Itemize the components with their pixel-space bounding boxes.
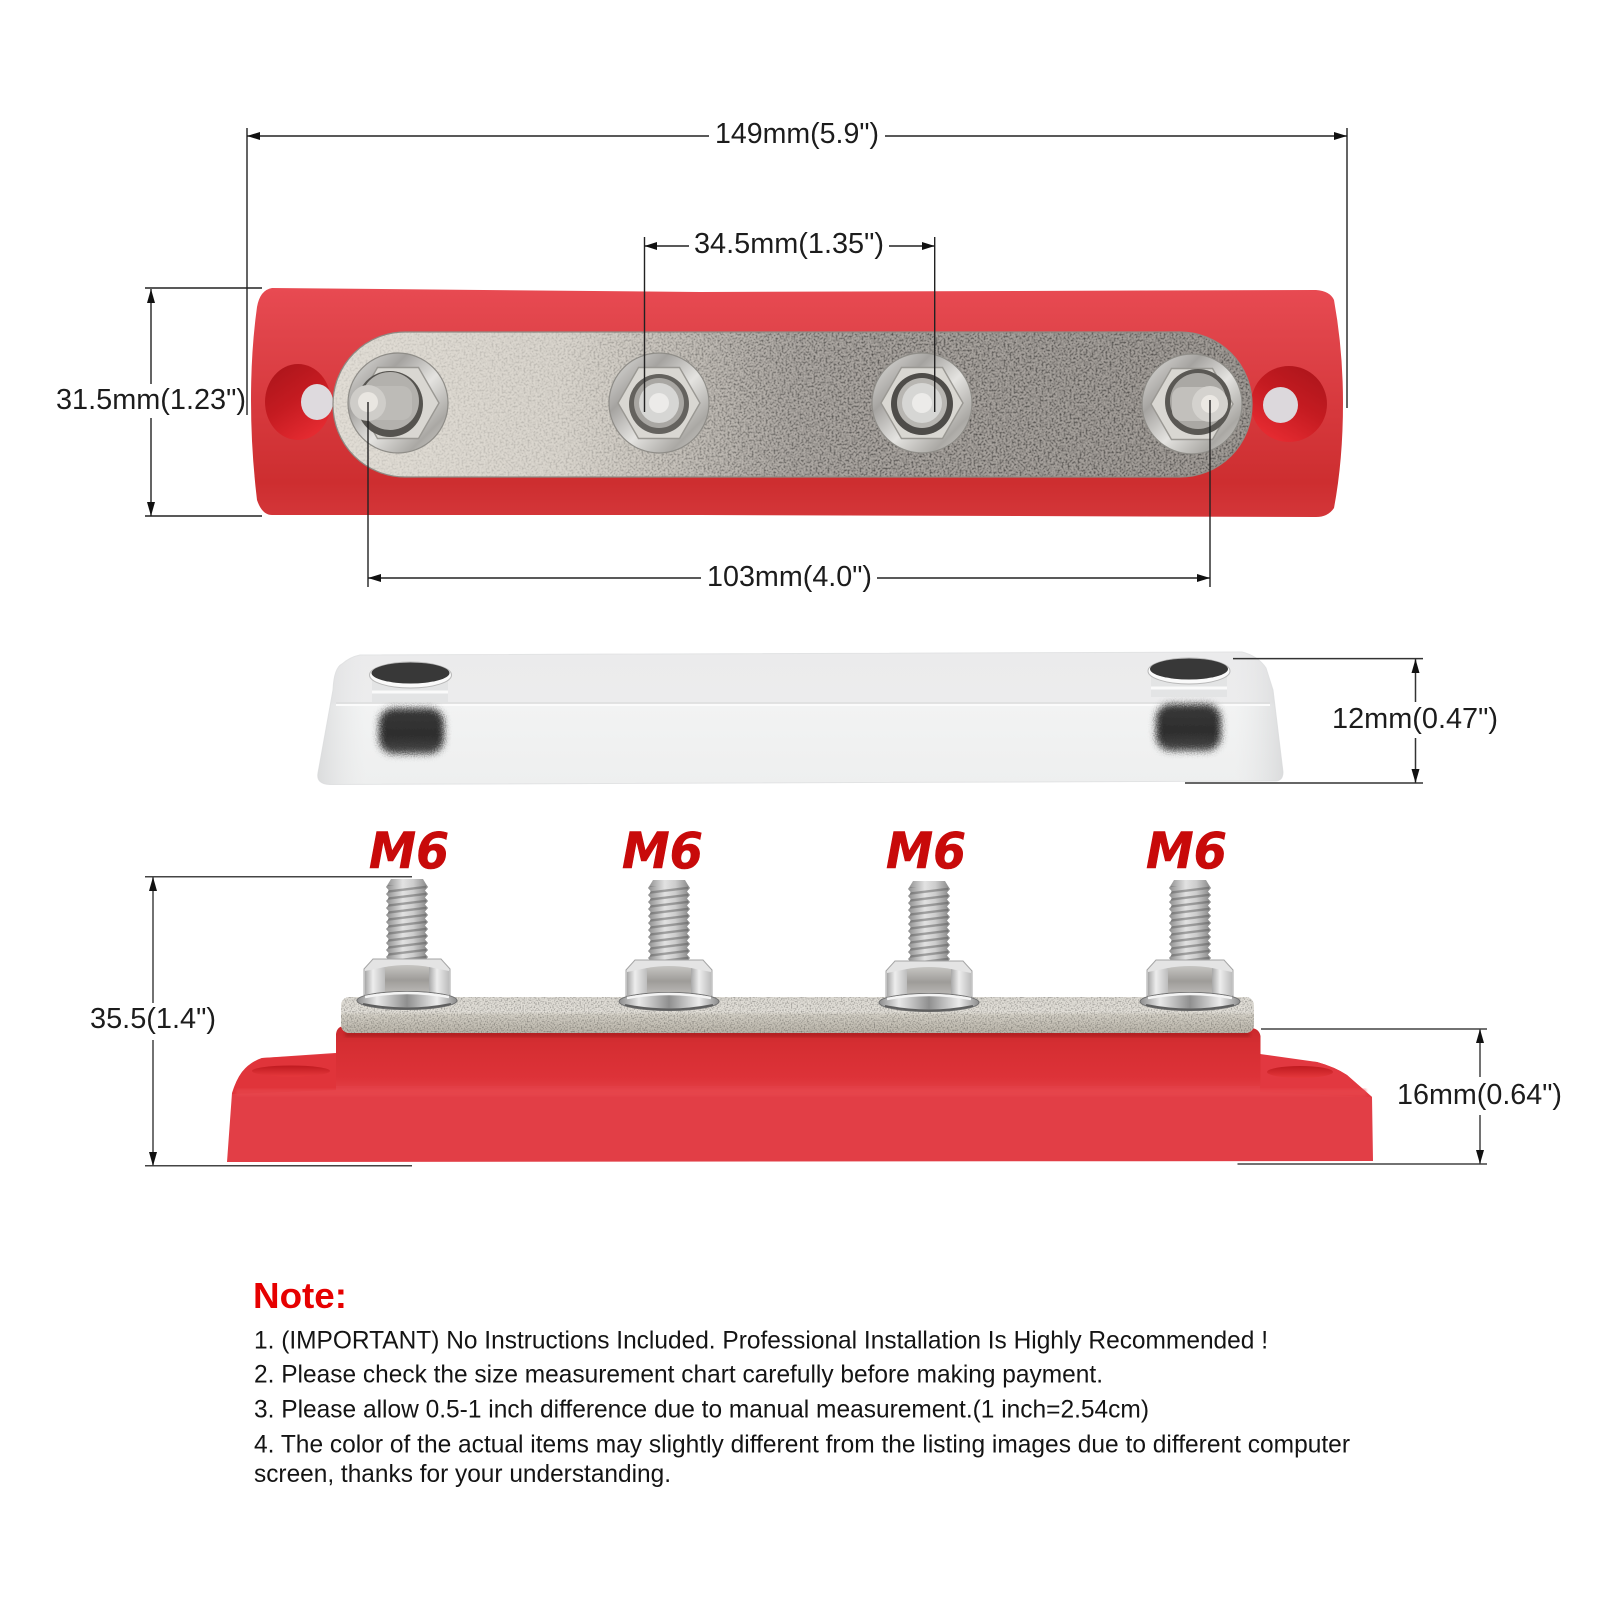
cover body: [318, 652, 1283, 784]
left top surface of flange: [232, 1054, 336, 1094]
dimension: overall length: [247, 118, 1347, 415]
panel: top view of bus bar: [251, 288, 1343, 517]
red base top view: [251, 288, 1343, 517]
dimension: outer stud spacing: 103mm(4.0"): [707, 561, 872, 593]
right post: [1148, 658, 1230, 751]
dimension: stud spacing: 34.5mm(1.35"): [694, 228, 884, 260]
dimension: width: [56, 288, 262, 516]
left post: [370, 662, 452, 754]
nut 1: [348, 353, 448, 453]
note text block: [254, 1326, 1350, 1488]
raised red block: [336, 1026, 1260, 1086]
metal plate: [333, 332, 1252, 477]
nut 2: [609, 353, 709, 453]
bolt 2: [619, 880, 719, 1010]
panel: side view of bus bar: [227, 879, 1373, 1162]
left mounting slot: [252, 1066, 330, 1076]
M6 label 2: M6: [622, 822, 703, 880]
dimension: stud spacing: [644, 228, 935, 412]
note heading: Note:: [253, 1275, 347, 1316]
right top surface of flange: [1260, 1054, 1372, 1097]
note line 3: 3. Please allow 0.5-1 inch difference due to manual measurement.(1 inch=2.54cm): [254, 1396, 1149, 1424]
cover side shading: [318, 652, 1283, 784]
dimension: cover height: 12mm(0.47"): [1332, 703, 1498, 735]
M6 label 3: M6: [886, 822, 966, 880]
dimension: base height: 16mm(0.64"): [1397, 1079, 1562, 1111]
plate shadow: [345, 1031, 1250, 1037]
bolt 3: [879, 881, 979, 1012]
note line 4: 4. The color of the actual items may slightly different from the listing images due to different computer: [254, 1430, 1350, 1458]
dimension: overall length: 149mm(5.9"): [715, 118, 879, 150]
nut 4: [1142, 354, 1242, 454]
dimension: base height: [1238, 1029, 1562, 1164]
right mounting slot: [1267, 1066, 1333, 1078]
panel: clear cover: [318, 652, 1283, 784]
left mounting hole: [265, 364, 333, 440]
dimension: width: 31.5mm(1.23"): [56, 384, 246, 416]
cover edge highlight lower: [336, 704, 1270, 706]
note line 5: screen, thanks for your understanding.: [254, 1460, 671, 1488]
bolt 1: [357, 879, 457, 1010]
nut 3: [872, 353, 972, 453]
side metal plate: [341, 997, 1254, 1033]
dimension: cover height: [1185, 659, 1498, 783]
M6 label 4: M6: [1146, 822, 1227, 880]
block highlight ridge: [236, 1089, 1366, 1096]
bolt 4: [1140, 880, 1240, 1010]
red base side view: [227, 1053, 1373, 1162]
dimension: total height: [90, 877, 412, 1166]
right mounting hole: [1251, 366, 1327, 442]
dimension: outer stud spacing: [368, 400, 1210, 593]
dimension: total height: 35.5(1.4"): [90, 1003, 216, 1035]
cover edge highlight: [336, 702, 1270, 704]
note line 1: 1. (IMPORTANT) No Instructions Included. Professional Installation Is Highly Recommended !: [254, 1326, 1268, 1354]
M6 label 1: M6: [369, 822, 449, 880]
note line 2: 2. Please check the size measurement chart carefully before making payment.: [254, 1360, 1103, 1388]
